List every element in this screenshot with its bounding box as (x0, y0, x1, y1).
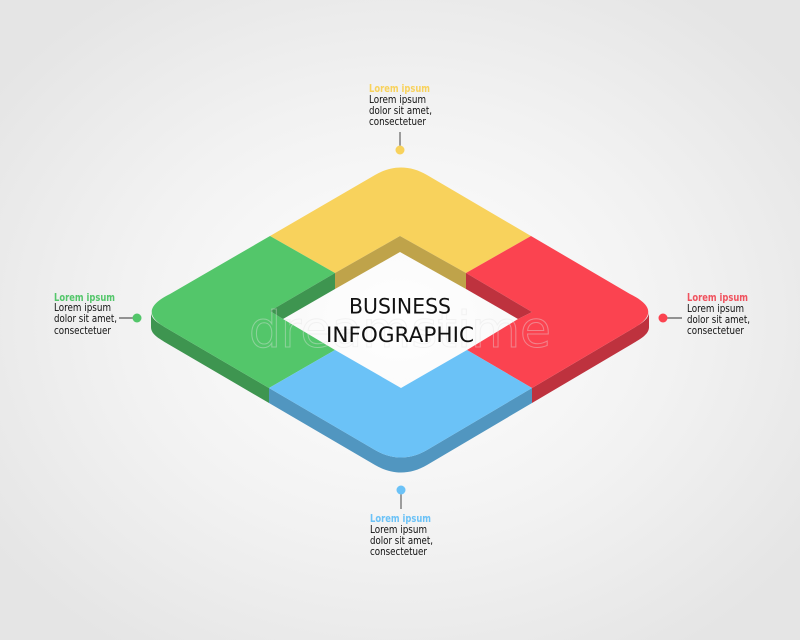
title: BUSINESS (349, 294, 451, 320)
callout: blue bottom: dolor sit amet, (370, 535, 433, 547)
callout: blue bottom: consectetuer (370, 546, 428, 558)
segment: red side wall (532, 312, 649, 403)
segment: yellow top face (270, 168, 531, 273)
callout: green left: dolor sit amet, (54, 313, 117, 325)
segment: green top face (152, 236, 335, 388)
callout: red right (658, 292, 750, 337)
segment: green inner wall (270, 273, 335, 319)
callout: red right: dolor sit amet, (687, 314, 750, 326)
callout: yellow top (369, 83, 432, 154)
callout: red right: Lorem ipsum (687, 292, 748, 304)
callout: yellow top: consectetuer (369, 116, 427, 128)
segment: yellow inner wall (335, 236, 466, 289)
callout: blue bottom: Lorem ipsum (370, 524, 427, 536)
callout: yellow top: Lorem ipsum (369, 94, 426, 106)
title (326, 294, 474, 348)
callout: yellow top: dolor sit amet, (369, 105, 432, 117)
title: INFOGRAPHIC (326, 323, 474, 348)
callout: green left: Lorem ipsum (54, 292, 115, 304)
segment: red inner wall (466, 273, 532, 319)
segment: blue side wall (269, 388, 532, 472)
watermark: dreamstime (249, 301, 551, 359)
callout: blue bottom (370, 486, 433, 558)
segment: red top face (466, 236, 648, 388)
segment: green side wall (151, 312, 269, 403)
callout: blue bottom: Lorem ipsum (370, 513, 431, 525)
segment: blue top face (269, 350, 532, 458)
callout: green left: Lorem ipsum (54, 302, 111, 314)
callout: red right: Lorem ipsum (687, 303, 744, 315)
callout: green left (54, 292, 142, 337)
callout: red right: consectetuer (687, 325, 745, 337)
callout: yellow top: Lorem ipsum (369, 83, 430, 95)
callout: green left: consectetuer (54, 325, 112, 337)
diagram: isometric rounded diamond (151, 168, 649, 472)
